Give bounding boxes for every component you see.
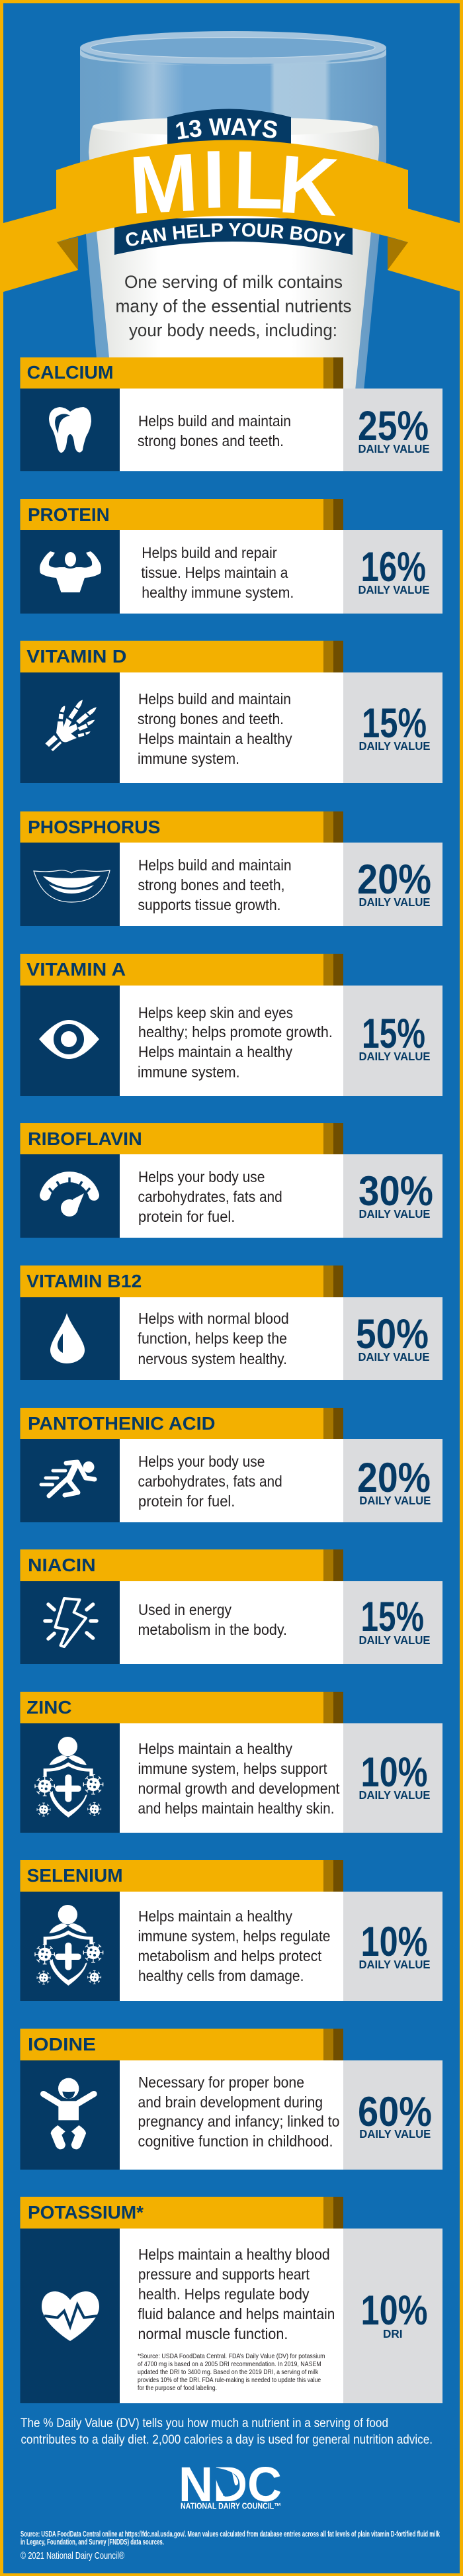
intro text: your body needs, including: (129, 320, 337, 340)
daily value: protein: DAILY VALUE (358, 583, 430, 596)
panel: protein (20, 499, 442, 614)
heading: selenium: SELENIUM (27, 1865, 123, 1886)
description: pantothenic acid: carbohydrates, fats and (138, 1473, 282, 1490)
intro text (115, 272, 352, 340)
description: phosphorus: Helps build and maintain (138, 856, 292, 874)
description: potassium: normal muscle function. (138, 2325, 288, 2342)
description: zinc (138, 1740, 340, 1817)
icon: smile (34, 870, 110, 902)
daily value: selenium: 10% (361, 1919, 427, 1965)
description: zinc: normal growth and development (138, 1780, 340, 1797)
daily value explanation: The % Daily Value (DV) tells you how much a nutrient in a serving of food (21, 2416, 388, 2430)
daily value explanation (21, 2416, 433, 2447)
daily value: vitamin b12: 50% (356, 1311, 429, 1357)
description: vitamin d (138, 690, 292, 767)
panel: zinc (20, 1692, 442, 1833)
description: iodine: cognitive function in childhood. (138, 2133, 333, 2150)
heading: zinc: ZINC (26, 1697, 72, 1718)
icon: lightning bolt (45, 1598, 97, 1647)
banner top tab: 13 ways: 13 WAYS (176, 118, 277, 140)
description: iodine (138, 2074, 340, 2150)
description: iodine: Necessary for proper bone (138, 2074, 304, 2091)
icon: gauge (45, 1177, 94, 1217)
panel: selenium (20, 1860, 442, 2001)
heading: vitamin b12: VITAMIN B12 (26, 1271, 142, 1291)
description: pantothenic acid: Helps your body use (138, 1453, 265, 1470)
panel: vitamin d (20, 641, 442, 783)
source note (21, 2531, 440, 2547)
footnote: potassium: updated the DRI to 3400 mg. Based on the 2019 DRI, a serving of milk (138, 2368, 319, 2376)
daily value: iodine: 60% (358, 2089, 432, 2135)
footnote: potassium (138, 2352, 325, 2392)
description: vitamin d: immune system. (138, 750, 239, 767)
icon: immune shield (35, 1737, 103, 1817)
description: vitamin b12: function, helps keep the (138, 1330, 287, 1347)
daily value: pantothenic acid: 20% (357, 1455, 431, 1501)
panel: pantothenic acid (20, 1408, 442, 1522)
description: potassium: pressure and supports heart (138, 2266, 310, 2283)
intro text: One serving of milk contains (124, 272, 343, 292)
daily value: phosphorus: DAILY VALUE (358, 896, 430, 909)
description: pantothenic acid: protein for fuel. (138, 1493, 235, 1510)
footnote: potassium: provides 10% of the DRI. FDA rule-making is needed to update this value (138, 2376, 321, 2384)
panel: niacin (20, 1549, 442, 1664)
panel: riboflavin (20, 1123, 442, 1238)
daily value: phosphorus: 20% (357, 856, 431, 903)
daily value: riboflavin: DAILY VALUE (358, 1207, 430, 1220)
panel: vitamin b12 (20, 1265, 442, 1380)
description: vitamin a: immune system. (138, 1063, 239, 1080)
heading: protein: PROTEIN (28, 504, 110, 525)
description: zinc: immune system, helps support (138, 1760, 327, 1777)
daily value: protein: 16% (361, 544, 426, 590)
icon: heart with pulse (42, 2291, 99, 2341)
description: selenium: metabolism and helps protect (138, 1947, 322, 1964)
daily value: selenium: DAILY VALUE (358, 1958, 430, 1971)
description: potassium: health. Helps regulate body (138, 2285, 310, 2303)
daily value: pantothenic acid: DAILY VALUE (359, 1494, 431, 1507)
footnote: potassium: *Source: USDA FoodData Central. FDA’s Daily Value (DV) for potassium (138, 2352, 325, 2360)
description: vitamin b12 (138, 1310, 289, 1367)
panel: potassium (20, 2197, 442, 2403)
description: selenium (138, 1908, 331, 1984)
icon: runner (41, 1461, 95, 1496)
description: riboflavin (138, 1168, 282, 1225)
description: calcium (138, 412, 291, 449)
description: pantothenic acid (138, 1453, 282, 1510)
heading: phosphorus: PHOSPHORUS (28, 817, 160, 837)
daily value: vitamin d: DAILY VALUE (358, 739, 430, 753)
description: vitamin b12: Helps with normal blood (138, 1310, 289, 1327)
icon: baby (44, 2078, 94, 2149)
description: potassium: fluid balance and helps maintain (138, 2305, 335, 2323)
heading: pantothenic acid: PANTOTHENIC ACID (28, 1413, 216, 1434)
daily value: vitamin a: 15% (362, 1011, 425, 1057)
logo: national dairy council: NDC (179, 2457, 282, 2512)
description: iodine: and brain development during (138, 2093, 323, 2111)
daily value: zinc: 10% (361, 1749, 427, 1796)
description: vitamin d: strong bones and teeth. (138, 710, 284, 727)
daily value: niacin: 15% (361, 1594, 424, 1640)
description: zinc: Helps maintain a healthy (138, 1740, 292, 1757)
panel: vitamin a (20, 954, 442, 1096)
description: protein (141, 544, 294, 601)
icon: immune shield (35, 1905, 103, 1986)
description: zinc: and helps maintain healthy skin. (138, 1800, 335, 1817)
icon: hand skeleton (45, 700, 97, 751)
logo: national dairy council: NATIONAL DAIRY COUNCIL™ (181, 2502, 281, 2511)
description: niacin: metabolism in the body. (138, 1621, 287, 1638)
heading: vitamin a: VITAMIN A (26, 959, 126, 980)
description: niacin (138, 1601, 287, 1638)
daily value: calcium: DAILY VALUE (358, 442, 430, 455)
icon: drop (50, 1313, 85, 1363)
panel: phosphorus (20, 811, 442, 926)
daily value: zinc: DAILY VALUE (358, 1788, 430, 1802)
description: selenium: healthy cells from damage. (138, 1967, 304, 1984)
daily value: vitamin d: 15% (362, 700, 427, 747)
daily value: vitamin b12: DAILY VALUE (358, 1350, 430, 1363)
gold ribbon with MILK (3, 134, 460, 292)
description: vitamin a: Helps maintain a healthy (138, 1043, 292, 1060)
icon: eye (39, 1020, 99, 1059)
description: vitamin a (138, 1004, 333, 1080)
description: potassium (138, 2246, 335, 2342)
description: phosphorus: supports tissue growth. (138, 896, 280, 913)
heading: riboflavin: RIBOFLAVIN (28, 1128, 142, 1149)
description: protein: healthy immune system. (142, 584, 294, 601)
heading: potassium: POTASSIUM* (28, 2202, 144, 2223)
icon: tooth (49, 407, 91, 453)
description: iodine: pregnancy and infancy; linked to (138, 2113, 340, 2130)
description: phosphorus: strong bones and teeth, (138, 876, 284, 894)
daily value: calcium: 25% (358, 403, 429, 449)
description: selenium: Helps maintain a healthy (138, 1908, 292, 1925)
description: niacin: Used in energy (138, 1601, 232, 1618)
dri value: potassium: 10% (361, 2287, 427, 2334)
description: phosphorus (138, 856, 292, 913)
description: vitamin a: healthy; helps promote growth. (138, 1023, 333, 1040)
panel: iodine (20, 2029, 442, 2170)
description: protein: tissue. Helps maintain a (141, 564, 288, 581)
description: riboflavin: carbohydrates, fats and (138, 1188, 282, 1205)
heading: iodine: IODINE (28, 2034, 96, 2054)
illustration: glass of milk (80, 31, 386, 397)
icon: flexing muscles (40, 551, 101, 592)
heading: vitamin d: VITAMIN D (26, 646, 126, 667)
description: potassium: Helps maintain a healthy blood (138, 2246, 330, 2263)
description: calcium: Helps build and maintain (138, 412, 291, 430)
daily value: vitamin a: DAILY VALUE (358, 1050, 430, 1063)
description: riboflavin: protein for fuel. (138, 1208, 235, 1225)
source note: in Legacy, Foundation, and Survey (FNDDS) data sources. (21, 2539, 164, 2547)
dri value: potassium: DRI (383, 2327, 402, 2340)
description: protein: Helps build and repair (142, 544, 277, 561)
footnote: potassium: of 4700 mg is based on a 2005 DRI recommendation. In 2019, NASEM (138, 2360, 321, 2368)
intro text: many of the essential nutrients (115, 297, 352, 316)
gold ribbon with MILK: MILK (127, 134, 341, 234)
description: selenium: immune system, helps regulate (138, 1927, 331, 1945)
heading: niacin: NIACIN (28, 1555, 96, 1575)
copyright: © 2021 National Dairy Council® (21, 2551, 124, 2561)
heading: calcium: CALCIUM (27, 362, 114, 383)
footnote: potassium: for the purpose of food labeling. (138, 2384, 217, 2392)
description: riboflavin: Helps your body use (138, 1168, 265, 1185)
description: vitamin a: Helps keep skin and eyes (138, 1004, 293, 1021)
description: vitamin d: Helps maintain a healthy (138, 730, 292, 747)
description: vitamin d: Helps build and maintain (138, 690, 291, 708)
description: vitamin b12: nervous system healthy. (138, 1350, 287, 1367)
daily value: iodine: DAILY VALUE (359, 2127, 431, 2140)
description: calcium: strong bones and teeth. (138, 432, 284, 449)
daily value: niacin: DAILY VALUE (358, 1633, 430, 1647)
banner bottom tab: can help your body: CAN HELP YOUR BODY (126, 223, 345, 246)
panel: calcium (20, 357, 442, 471)
daily value: riboflavin: 30% (358, 1168, 433, 1215)
